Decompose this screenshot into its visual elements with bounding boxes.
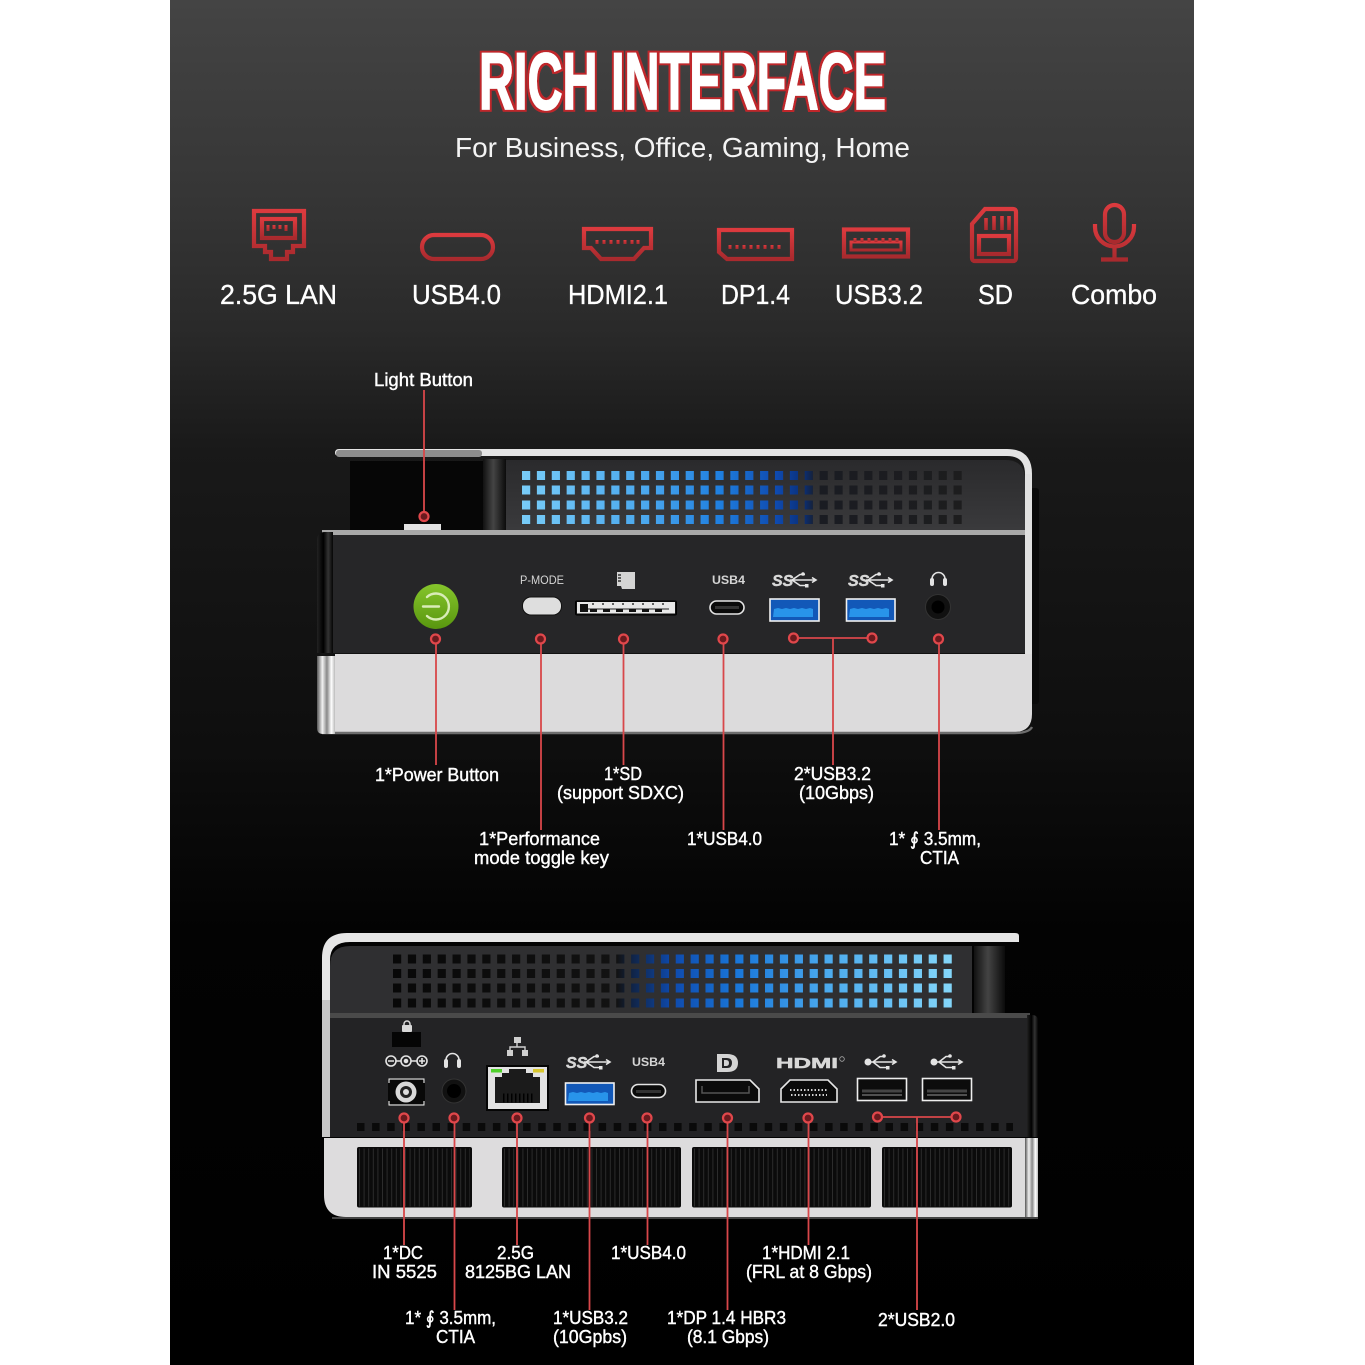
icon: SD (972, 209, 1016, 261)
lock icon and slot (392, 1021, 421, 1047)
SS logo (566, 1054, 610, 1072)
device: front view (317, 449, 1039, 734)
labels: rear view (372, 1243, 955, 1347)
right metal edge (1025, 1138, 1038, 1217)
label: HDMI: (FRL at 8 Gbps) (746, 1262, 872, 1282)
divider strip (330, 1013, 1030, 1018)
callout: P-mode (536, 634, 545, 830)
small holes row (357, 1123, 1013, 1131)
label: 2.5G LAN: 2.5G LAN (220, 279, 337, 310)
USB icon 2 (930, 1054, 962, 1070)
label: performance key (474, 829, 609, 868)
top vent body (330, 946, 972, 1013)
vent grid (522, 476, 963, 520)
silver base (324, 1138, 1025, 1217)
icon: LAN (254, 211, 304, 259)
light button cap (404, 524, 441, 530)
label: SD: (support SDXC) (557, 783, 684, 803)
label: DP: (8.1 Gbps) (687, 1327, 769, 1347)
top vent body (505, 460, 1025, 530)
hinge cylinder (483, 459, 506, 530)
label: USB3.2: (10Gbps) (799, 783, 874, 803)
left metal edge (317, 656, 335, 734)
callout: light button (420, 390, 428, 521)
label: audio: 1* ∮ 3.5mm, (405, 1308, 496, 1328)
label: DP1.4: DP1.4 (721, 279, 790, 310)
label: light button: Light Button (374, 370, 473, 390)
base bottom shadow (322, 727, 1032, 733)
P-MODE key (522, 597, 562, 615)
label: USB3.2: 2*USB3.2 (794, 764, 871, 784)
hinge cylinder (974, 946, 1005, 1013)
label: DP (667, 1308, 786, 1347)
USB2 port 1 (858, 1078, 906, 1100)
label: USB3.2 (553, 1308, 628, 1347)
label: performance key: mode toggle key (474, 848, 609, 868)
label: DC: IN 5525 (372, 1262, 437, 1282)
callout: USB4 (642, 1114, 652, 1245)
right silver edge (1025, 474, 1032, 654)
SS logo 1: SS (772, 573, 794, 590)
label: DP: 1*DP 1.4 HBR3 (667, 1308, 786, 1328)
label: HDMI (746, 1243, 872, 1282)
label: DC (372, 1243, 437, 1282)
icon: USB4.0 (422, 235, 493, 259)
silver strip (322, 530, 1026, 536)
label: USB4.0: 1*USB4.0 (687, 829, 762, 849)
callout: audio (450, 1114, 458, 1310)
USB3 port 1 (770, 599, 819, 621)
left silver edge (322, 1000, 330, 1137)
label: audio: CTIA (436, 1327, 475, 1347)
label: USB2.0: 2*USB2.0 (878, 1310, 955, 1330)
SS logo: SS (566, 1055, 588, 1072)
SS logo 2: SS (848, 573, 870, 590)
USB2 port 2 (922, 1078, 972, 1100)
callout: power button (431, 634, 440, 765)
front panel (333, 535, 1025, 653)
callout: LAN (512, 1114, 522, 1245)
DisplayPort logo (717, 1054, 738, 1072)
callouts: rear view (400, 1112, 960, 1310)
RJ45 LAN port (486, 1065, 549, 1111)
USB-C port (632, 1084, 666, 1098)
background panel (170, 0, 1194, 1365)
base vents (357, 1147, 1012, 1208)
title: RICH INTERFACE (479, 37, 886, 127)
device: rear view (322, 933, 1038, 1218)
network icon (507, 1037, 528, 1056)
power button (414, 584, 458, 629)
interface icon row (220, 205, 1157, 310)
label: audio (405, 1308, 496, 1347)
top shell (335, 449, 1032, 494)
SS logo 1 (772, 572, 816, 590)
label: USB3.2: 1*USB3.2 (553, 1308, 628, 1328)
labels: front view (374, 370, 981, 868)
label: USB3.2 (794, 764, 874, 803)
USB icon 1 (864, 1054, 896, 1070)
label: LAN (465, 1243, 571, 1282)
HDMI port (781, 1080, 837, 1102)
callout: SD (619, 634, 628, 765)
SS logo 2 (848, 572, 892, 590)
label: USB3.2: USB3.2 (835, 279, 923, 310)
icon: microphone (1095, 205, 1134, 260)
left recess (350, 461, 484, 530)
label: power button: 1*Power Button (375, 765, 499, 785)
callout: HDMI (804, 1114, 812, 1245)
DisplayPort port (696, 1080, 759, 1102)
rear sliver (1030, 488, 1039, 704)
label: LAN: 2.5G (497, 1243, 534, 1263)
icon: USB3.2 (844, 230, 908, 256)
right edge (1027, 1015, 1038, 1137)
rear panel (330, 1018, 1028, 1137)
SD slot (576, 601, 676, 615)
callout: USB2.0 (873, 1112, 960, 1310)
USB4 label: USB4 (632, 1055, 665, 1069)
label: audio: CTIA (920, 848, 959, 868)
icon: DP (719, 230, 792, 259)
label: performance key: 1*Performance (479, 829, 600, 849)
left black cap (317, 532, 333, 653)
callout: USB3.2 (585, 1114, 594, 1310)
label: USB3.2: (10Gpbs) (553, 1327, 627, 1347)
icon: HDMI (584, 229, 651, 259)
label: SD: 1*SD (604, 764, 642, 784)
label: USB4.0: USB4.0 (412, 279, 501, 310)
headphone icon (930, 572, 947, 586)
label: Combo: Combo (1071, 279, 1157, 310)
callout: audio (934, 634, 943, 830)
subtitle: For Business, Office, Gaming, Home (455, 132, 910, 163)
label: HDMI: 1*HDMI 2.1 (762, 1243, 850, 1263)
USB3 port 2 (846, 599, 895, 621)
callout: DP (723, 1114, 732, 1310)
label: USB4.0: 1*USB4.0 (611, 1243, 686, 1263)
top shell (322, 933, 1019, 1038)
USB4 label: USB4 (712, 573, 745, 587)
USB3 port (566, 1083, 614, 1104)
HDMI logo: HDMI (776, 1055, 838, 1072)
audio jack (926, 594, 950, 620)
top shell grey left part (336, 450, 482, 457)
SD icon (617, 572, 635, 589)
base bottom shadow (332, 1217, 1038, 1219)
label: audio (889, 829, 981, 868)
label: LAN: 8125BG LAN (465, 1262, 571, 1282)
DC port (388, 1078, 425, 1106)
DC polarity icon (386, 1056, 427, 1066)
callout: USB4 (718, 634, 728, 830)
HDMI logo (776, 1055, 844, 1072)
USB-C port (710, 601, 744, 614)
callouts: front view (420, 390, 943, 830)
vent grid (393, 959, 953, 1003)
callout: DC (400, 1114, 408, 1245)
label: audio: 1* ∮ 3.5mm, (889, 829, 981, 849)
label: HDMI2.1: HDMI2.1 (568, 279, 668, 310)
P-MODE label: P-MODE (520, 573, 564, 587)
audio jack (442, 1079, 466, 1103)
headphone icon (444, 1054, 461, 1068)
label: SD (557, 764, 684, 803)
callout: USB3.2 (789, 634, 876, 765)
label: DC: 1*DC (383, 1243, 423, 1263)
silver base (335, 654, 1032, 732)
label: SD: SD (978, 279, 1013, 310)
